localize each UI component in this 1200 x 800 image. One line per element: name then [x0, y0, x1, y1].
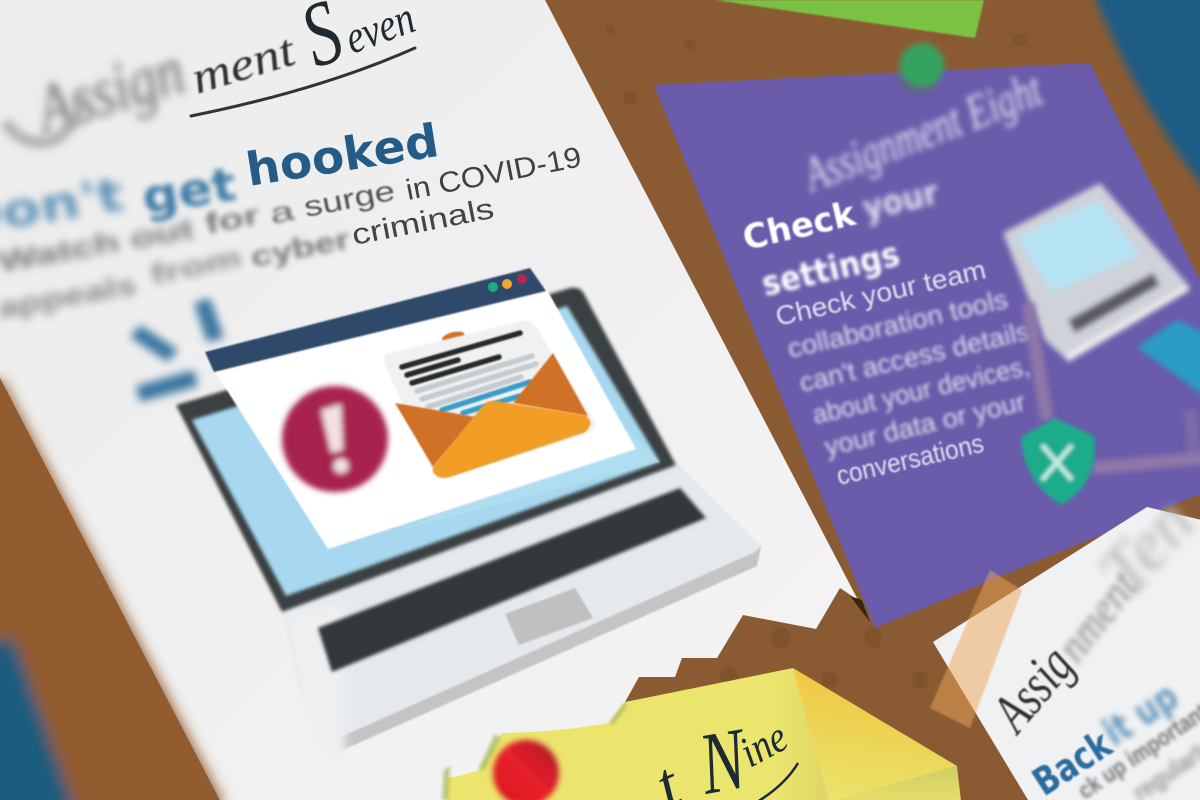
heading: Assignment Nine script: [645, 710, 798, 800]
panel: assignment nine yellow note: [442, 668, 962, 800]
trackpad: [505, 588, 593, 645]
panel: assignment eight purple note: [654, 60, 1200, 628]
panel: assignment ten paper: [933, 482, 1200, 800]
heading: Don't get hooked: get: [138, 157, 240, 225]
heading: Check your settings: your: [859, 173, 942, 229]
heading: Check your settings: Check: [739, 194, 860, 259]
window control dots: [488, 274, 527, 292]
icon: tape strip: [930, 570, 1022, 728]
heading: Assignment Ten script: nment: [1046, 560, 1148, 671]
text block: subtitle: from: [148, 241, 244, 292]
blue shape top right: [1092, 0, 1200, 195]
text block: subtitle: a: [267, 195, 298, 231]
text block: subtitle: in COVID-19: [403, 141, 584, 207]
laptop screen: [192, 306, 660, 596]
heading: Assignment Seven script: ment: [185, 24, 302, 104]
email window: [205, 268, 636, 549]
keyboard: [318, 488, 706, 672]
text block: settings description: can't access details: [797, 316, 1032, 398]
icon: click burst: [130, 298, 224, 402]
text block: settings description: your data or your: [822, 386, 1028, 462]
icon: alert circle: [282, 386, 388, 492]
text block: settings description: about your devices,: [810, 351, 1033, 430]
illustration: laptop: [176, 268, 761, 760]
text block: settings description: [773, 254, 1033, 491]
text block: settings description: conversations: [834, 428, 987, 491]
text block: subtitle: cyber: [248, 223, 352, 274]
text block: subtitle: surge: [301, 175, 398, 224]
network connector lines: [1028, 303, 1200, 468]
text block: subtitle: criminals: [349, 193, 497, 252]
laptop base: [282, 462, 761, 760]
icon: green shield: [1021, 418, 1095, 505]
text block: settings description: Check your team: [773, 254, 989, 332]
heading: Don't get hooked: hooked: [242, 113, 442, 197]
heading: Assignment Seven script: Assign: [24, 32, 193, 150]
heading: Assignment Ten script: Assig: [979, 635, 1086, 746]
icon: blue device: [1137, 320, 1200, 400]
panel: assignment seven paper: [0, 0, 858, 800]
text block: subtitle: [0, 141, 584, 325]
green tab: [442, 702, 627, 800]
illustration: small laptop: [1003, 183, 1190, 362]
icon: red pin: [493, 740, 559, 800]
green note top: [715, 0, 984, 38]
heading: Back it up: [1025, 674, 1186, 800]
heading: Assignment Eight script: Assignment Eight: [794, 60, 1050, 203]
heading: Check your settings: settings: [758, 234, 903, 305]
folded corner: [793, 668, 957, 800]
window title bar: [205, 268, 546, 372]
text block: subtitle: for: [202, 199, 262, 241]
heading: Assignment Ten script: [979, 482, 1200, 746]
heading: Check your settings: [739, 173, 942, 305]
icon: envelope with letter: [384, 321, 595, 478]
heading: Assignment Nine script: ine: [732, 712, 795, 777]
icon: green pin: [896, 43, 944, 96]
heading: Back it up: it up: [1095, 674, 1186, 755]
paper corner shadow: [850, 596, 870, 622]
heading: Assignment Seven script: [5, 0, 421, 150]
text block: settings description: collaboration tools: [785, 284, 1011, 364]
laptop screen frame: [176, 288, 676, 612]
lower flap: [826, 766, 962, 800]
heading: Don't get hooked: [0, 113, 442, 247]
blurred brown shape bottom left: [0, 380, 225, 800]
